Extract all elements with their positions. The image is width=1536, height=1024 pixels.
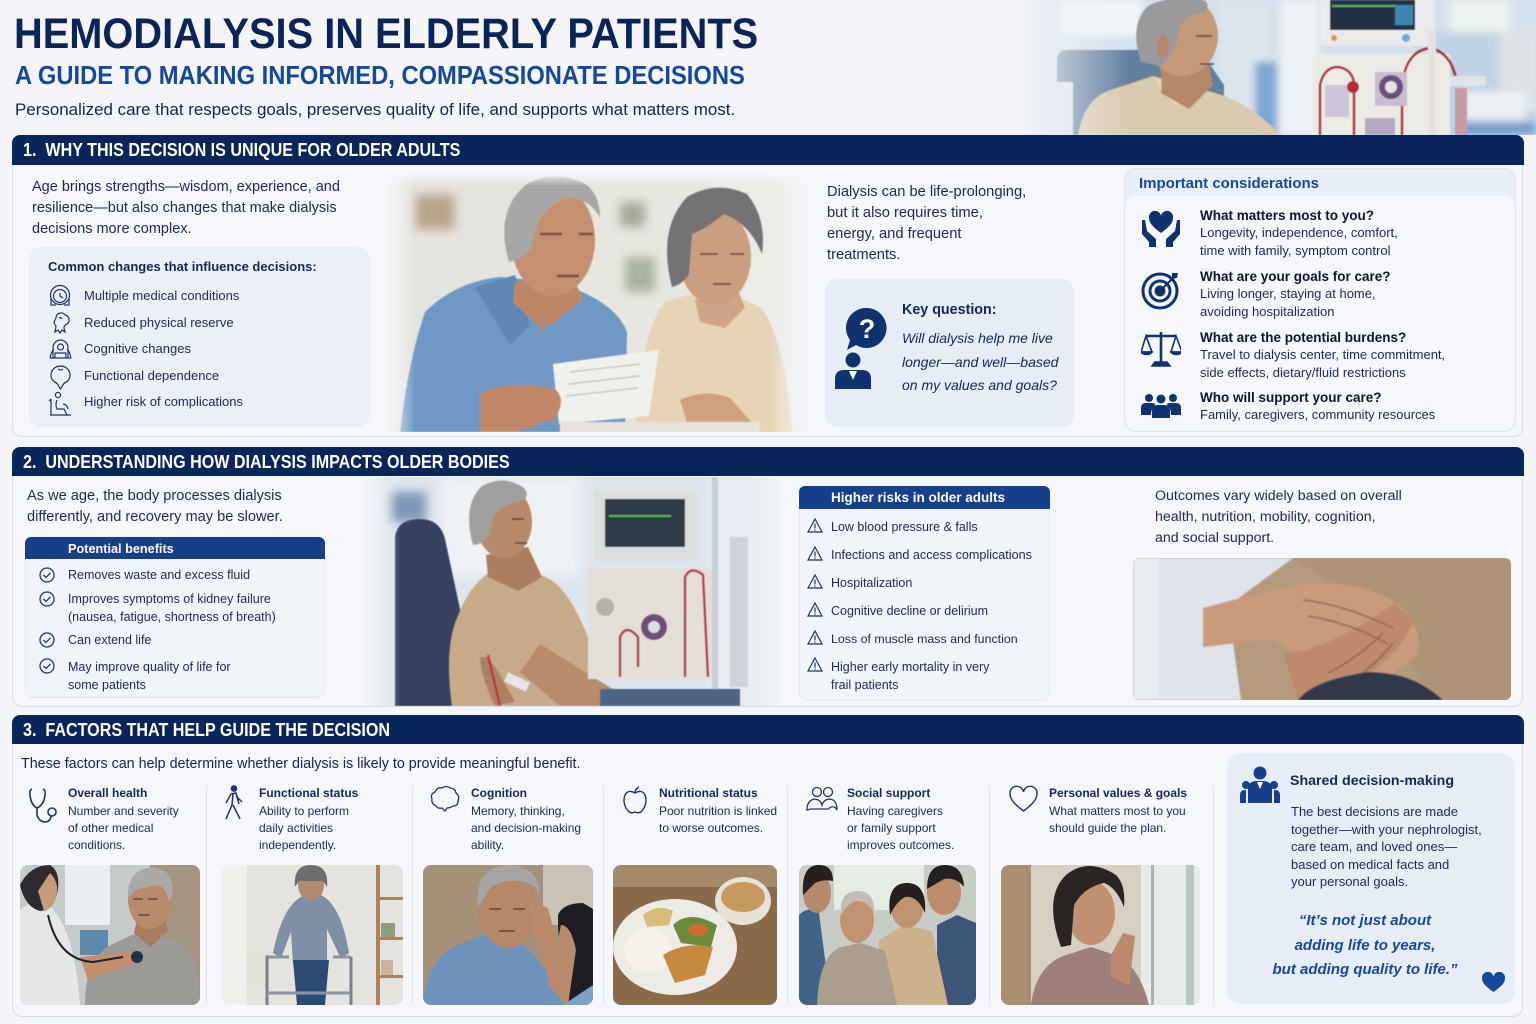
text: social support bbox=[847, 785, 954, 854]
list: benefits text: May improve quality of life for bbox=[68, 660, 231, 674]
photo: doctor with stethoscope bbox=[20, 865, 200, 1005]
heading: section 2 bbox=[12, 447, 1524, 476]
heading: key question: Key question: bbox=[902, 302, 997, 318]
photo: caring hands bbox=[1133, 558, 1511, 700]
text: overall health bbox=[68, 786, 179, 852]
icon: supporting people bbox=[806, 786, 838, 812]
icon: heart in hands bbox=[1142, 210, 1180, 247]
photo: family together bbox=[799, 865, 976, 1005]
text: functional status: Ability to perform bbox=[259, 804, 349, 818]
text: potential burdens: side effects, dietary/fluid restrictions bbox=[1200, 365, 1406, 380]
text: overall health: Overall health bbox=[68, 786, 147, 800]
icon: walking person bbox=[225, 785, 242, 820]
text: personal values: should guide the plan. bbox=[1049, 821, 1166, 835]
panel: higher risks bbox=[799, 486, 1050, 701]
tagline: Personalized care that respects goals, preserves quality of life, and supports what matters most. bbox=[15, 100, 735, 119]
list: benefits text: Can extend life bbox=[68, 633, 151, 647]
list: common changes text bbox=[84, 288, 243, 409]
heading: common changes: Common changes that influence decisions: bbox=[48, 259, 317, 274]
text block: age brings strengths: Age brings strengths—wisdom, experience, and bbox=[32, 179, 340, 195]
heading: section 3 bbox=[12, 715, 1524, 744]
text: personal values bbox=[1049, 785, 1187, 837]
photo: woman looking out window bbox=[1001, 865, 1200, 1005]
callout: key question bbox=[825, 279, 1074, 427]
icons: check marks bbox=[39, 567, 55, 674]
text: nutritional status: to worse outcomes. bbox=[659, 821, 763, 835]
list: common changes text: Multiple medical conditions bbox=[84, 288, 239, 303]
factor: personal values and goals bbox=[1008, 785, 1198, 845]
heading: section 2: 2. UNDERSTANDING HOW DIALYSIS IMPACTS OLDER BODIES bbox=[23, 452, 510, 472]
text block: dialysis can be life-prolonging: but it also requires time, bbox=[827, 205, 983, 221]
factor: social support bbox=[805, 785, 980, 855]
list: benefits text: (nausea, fatigue, shortness of breath) bbox=[68, 610, 276, 624]
list: risks text: Low blood pressure & falls bbox=[831, 520, 978, 534]
heading: section 1: 1. WHY THIS DECISION IS UNIQUE FOR OLDER ADULTS bbox=[23, 140, 460, 160]
text: cognition: Memory, thinking, bbox=[471, 804, 565, 818]
text: cognition: ability. bbox=[471, 838, 504, 852]
list: common changes text: Higher risk of complications bbox=[84, 394, 243, 409]
text: what matters: Longevity, independence, comfort, bbox=[1200, 225, 1398, 240]
text block: dialysis can be life-prolonging: Dialysis can be life-prolonging, bbox=[827, 184, 1026, 200]
text: shared decision-making: together—with your nephrologist, bbox=[1291, 822, 1482, 837]
list: common changes text: Functional dependence bbox=[84, 368, 219, 383]
factor: overall health bbox=[29, 786, 179, 852]
text: nutritional status bbox=[659, 786, 777, 835]
text: potential burdens bbox=[1200, 330, 1445, 380]
heading: shared decision-making: Shared decision-making bbox=[1290, 773, 1454, 789]
text block: outcomes vary bbox=[1155, 488, 1402, 546]
text: shared decision-making bbox=[1291, 803, 1482, 891]
photo: plate of food bbox=[613, 865, 777, 1005]
icon: target bbox=[1142, 272, 1178, 310]
heading: higher risks: Higher risks in older adults bbox=[831, 490, 1005, 505]
panel: factors that guide the decision bbox=[12, 716, 1523, 1017]
text: potential burdens: What are the potential burdens? bbox=[1200, 330, 1406, 345]
title: HEMODIALYSIS IN ELDERLY PATIENTS bbox=[14, 11, 758, 58]
text: goals for care bbox=[1200, 269, 1391, 319]
panel: shared decision-making bbox=[1227, 753, 1515, 1004]
text: who will support: Who will support your care? bbox=[1200, 390, 1382, 405]
icon: question and person: ? bbox=[859, 314, 875, 344]
text: key question: on my values and goals? bbox=[902, 377, 1057, 393]
text: goals for care: avoiding hospitalization bbox=[1200, 304, 1334, 319]
text block: age brings strengths: decisions more complex. bbox=[32, 221, 192, 237]
factor: nutritional status bbox=[623, 786, 777, 835]
photo: couple reviewing paperwork bbox=[394, 176, 796, 432]
icons: warning triangles bbox=[807, 518, 823, 672]
text: goals for care: What are your goals for care? bbox=[1200, 269, 1391, 284]
factor: cognition bbox=[430, 786, 581, 852]
photo: man with hand on forehead bbox=[423, 865, 593, 1005]
quote bbox=[1227, 909, 1503, 982]
text block: age brings strengths: resilience—but also changes that make dialysis bbox=[32, 200, 337, 216]
list: common changes text: Cognitive changes bbox=[84, 341, 191, 356]
text: social support: Having caregivers bbox=[847, 804, 943, 818]
list: risks text: Loss of muscle mass and function bbox=[831, 632, 1018, 646]
text: personal values: What matters most to you bbox=[1049, 804, 1186, 818]
text block: outcomes vary: health, nutrition, mobility, cognition, bbox=[1155, 509, 1376, 525]
text block: outcomes vary: Outcomes vary widely based on overall bbox=[1155, 488, 1402, 504]
panel: how dialysis impacts older bodies bbox=[12, 448, 1523, 707]
text: potential burdens: Travel to dialysis center, time commitment, bbox=[1200, 347, 1445, 362]
list: risks text: Cognitive decline or delirium bbox=[831, 604, 988, 618]
list: risks text: Higher early mortality in very bbox=[831, 660, 989, 674]
text block: dialysis can be life-prolonging bbox=[827, 184, 1026, 263]
panel: important considerations bbox=[1124, 168, 1516, 432]
text: personal values: Personal values & goals bbox=[1049, 786, 1187, 800]
heading: section 1 bbox=[12, 135, 1524, 165]
icon: question and person bbox=[835, 308, 887, 389]
card: considerations list bbox=[1125, 196, 1515, 431]
list: risks text bbox=[831, 520, 1032, 692]
text: social support: or family support bbox=[847, 821, 936, 835]
heading: important considerations: Important considerations bbox=[1139, 175, 1319, 192]
text: shared decision-making: based on medical facts and bbox=[1291, 857, 1449, 872]
icon: brain bbox=[430, 786, 460, 812]
text block: outcomes vary: and social support. bbox=[1155, 530, 1274, 546]
text: cognition: Cognition bbox=[471, 786, 527, 800]
heading: potential benefits bbox=[25, 537, 325, 559]
heading: higher risks bbox=[799, 486, 1050, 509]
heading: section 3: 3. FACTORS THAT HELP GUIDE THE DECISION bbox=[23, 720, 390, 740]
text: goals for care: Living longer, staying at home, bbox=[1200, 286, 1376, 301]
text: what matters: time with family, symptom control bbox=[1200, 243, 1390, 258]
text: key question: longer—and well—based bbox=[902, 354, 1058, 370]
icon: people bbox=[1141, 394, 1181, 418]
quote: but adding quality to life.” bbox=[1272, 961, 1458, 978]
list: benefits text: Removes waste and excess fluid bbox=[68, 568, 250, 582]
quote: “It’s not just about bbox=[1299, 912, 1431, 929]
text: what matters bbox=[1200, 208, 1398, 258]
icon: scales bbox=[1141, 332, 1181, 367]
text block: dialysis can be life-prolonging: energy, and frequent bbox=[827, 226, 961, 242]
text block: as we age: differently, and recovery may be slower. bbox=[27, 509, 283, 525]
list: benefits text bbox=[68, 568, 276, 692]
panel: why this decision is unique bbox=[12, 136, 1523, 437]
photo: woman with walker bbox=[221, 865, 403, 1005]
subtitle: A GUIDE TO MAKING INFORMED, COMPASSIONATE DECISIONS bbox=[15, 62, 745, 90]
list: risks text: frail patients bbox=[831, 678, 898, 692]
text: who will support bbox=[1200, 390, 1435, 422]
icon: apple bbox=[623, 786, 647, 814]
text: functional status: Functional status bbox=[259, 786, 358, 800]
text: functional status bbox=[259, 786, 358, 852]
icons: common changes bbox=[48, 284, 72, 416]
quote: adding life to years, bbox=[1295, 936, 1435, 954]
icon: care team bbox=[1240, 766, 1280, 804]
panel: common changes bbox=[29, 247, 370, 427]
text: who will support: Family, caregivers, community resources bbox=[1200, 407, 1435, 422]
text block: factors intro: These factors can help determine whether dialysis is likely to provide meaningful benefit. bbox=[21, 756, 580, 772]
heading: potential benefits: Potential benefits bbox=[68, 542, 174, 556]
list: benefits text: some patients bbox=[68, 678, 146, 692]
text: functional status: independently. bbox=[259, 838, 336, 852]
text: cognition bbox=[471, 786, 581, 852]
text block: dialysis can be life-prolonging: treatments. bbox=[827, 247, 900, 263]
list: benefits text: Improves symptoms of kidney failure bbox=[68, 592, 271, 606]
text: overall health: conditions. bbox=[68, 838, 125, 852]
photo: patient receiving dialysis bbox=[375, 477, 768, 706]
list: common changes text: Reduced physical reserve bbox=[84, 315, 234, 330]
header photo: patient beside dialysis machine bbox=[1040, 0, 1536, 135]
text block: age brings strengths bbox=[32, 179, 340, 237]
text: cognition: and decision-making bbox=[471, 821, 581, 835]
list: risks text: Infections and access complications bbox=[831, 548, 1032, 562]
text: shared decision-making: The best decisions are made bbox=[1291, 804, 1458, 819]
list: risks text: Hospitalization bbox=[831, 576, 912, 590]
text: key question: Will dialysis help me live bbox=[902, 330, 1053, 346]
text: key question bbox=[902, 330, 1059, 393]
icon: stethoscope bbox=[29, 788, 57, 823]
icon: heart outline bbox=[1008, 785, 1039, 813]
text: shared decision-making: your personal goals. bbox=[1291, 874, 1408, 889]
text: what matters: What matters most to you? bbox=[1200, 208, 1374, 223]
text: functional status: daily activities bbox=[259, 821, 333, 835]
text: overall health: Number and severity bbox=[68, 804, 179, 818]
text: social support: Social support bbox=[847, 786, 930, 800]
icon: heart bbox=[1482, 972, 1505, 993]
panel: potential benefits bbox=[25, 537, 325, 698]
text block: as we age bbox=[27, 488, 283, 525]
text: social support: improves outcomes. bbox=[847, 838, 954, 852]
text: nutritional status: Nutritional status bbox=[659, 786, 758, 800]
text block: as we age: As we age, the body processes dialysis bbox=[27, 488, 282, 504]
factor: functional status bbox=[225, 785, 358, 852]
text: overall health: of other medical bbox=[68, 821, 153, 835]
text: nutritional status: Poor nutrition is linked bbox=[659, 804, 777, 818]
text: shared decision-making: care team, and loved ones— bbox=[1291, 839, 1457, 854]
